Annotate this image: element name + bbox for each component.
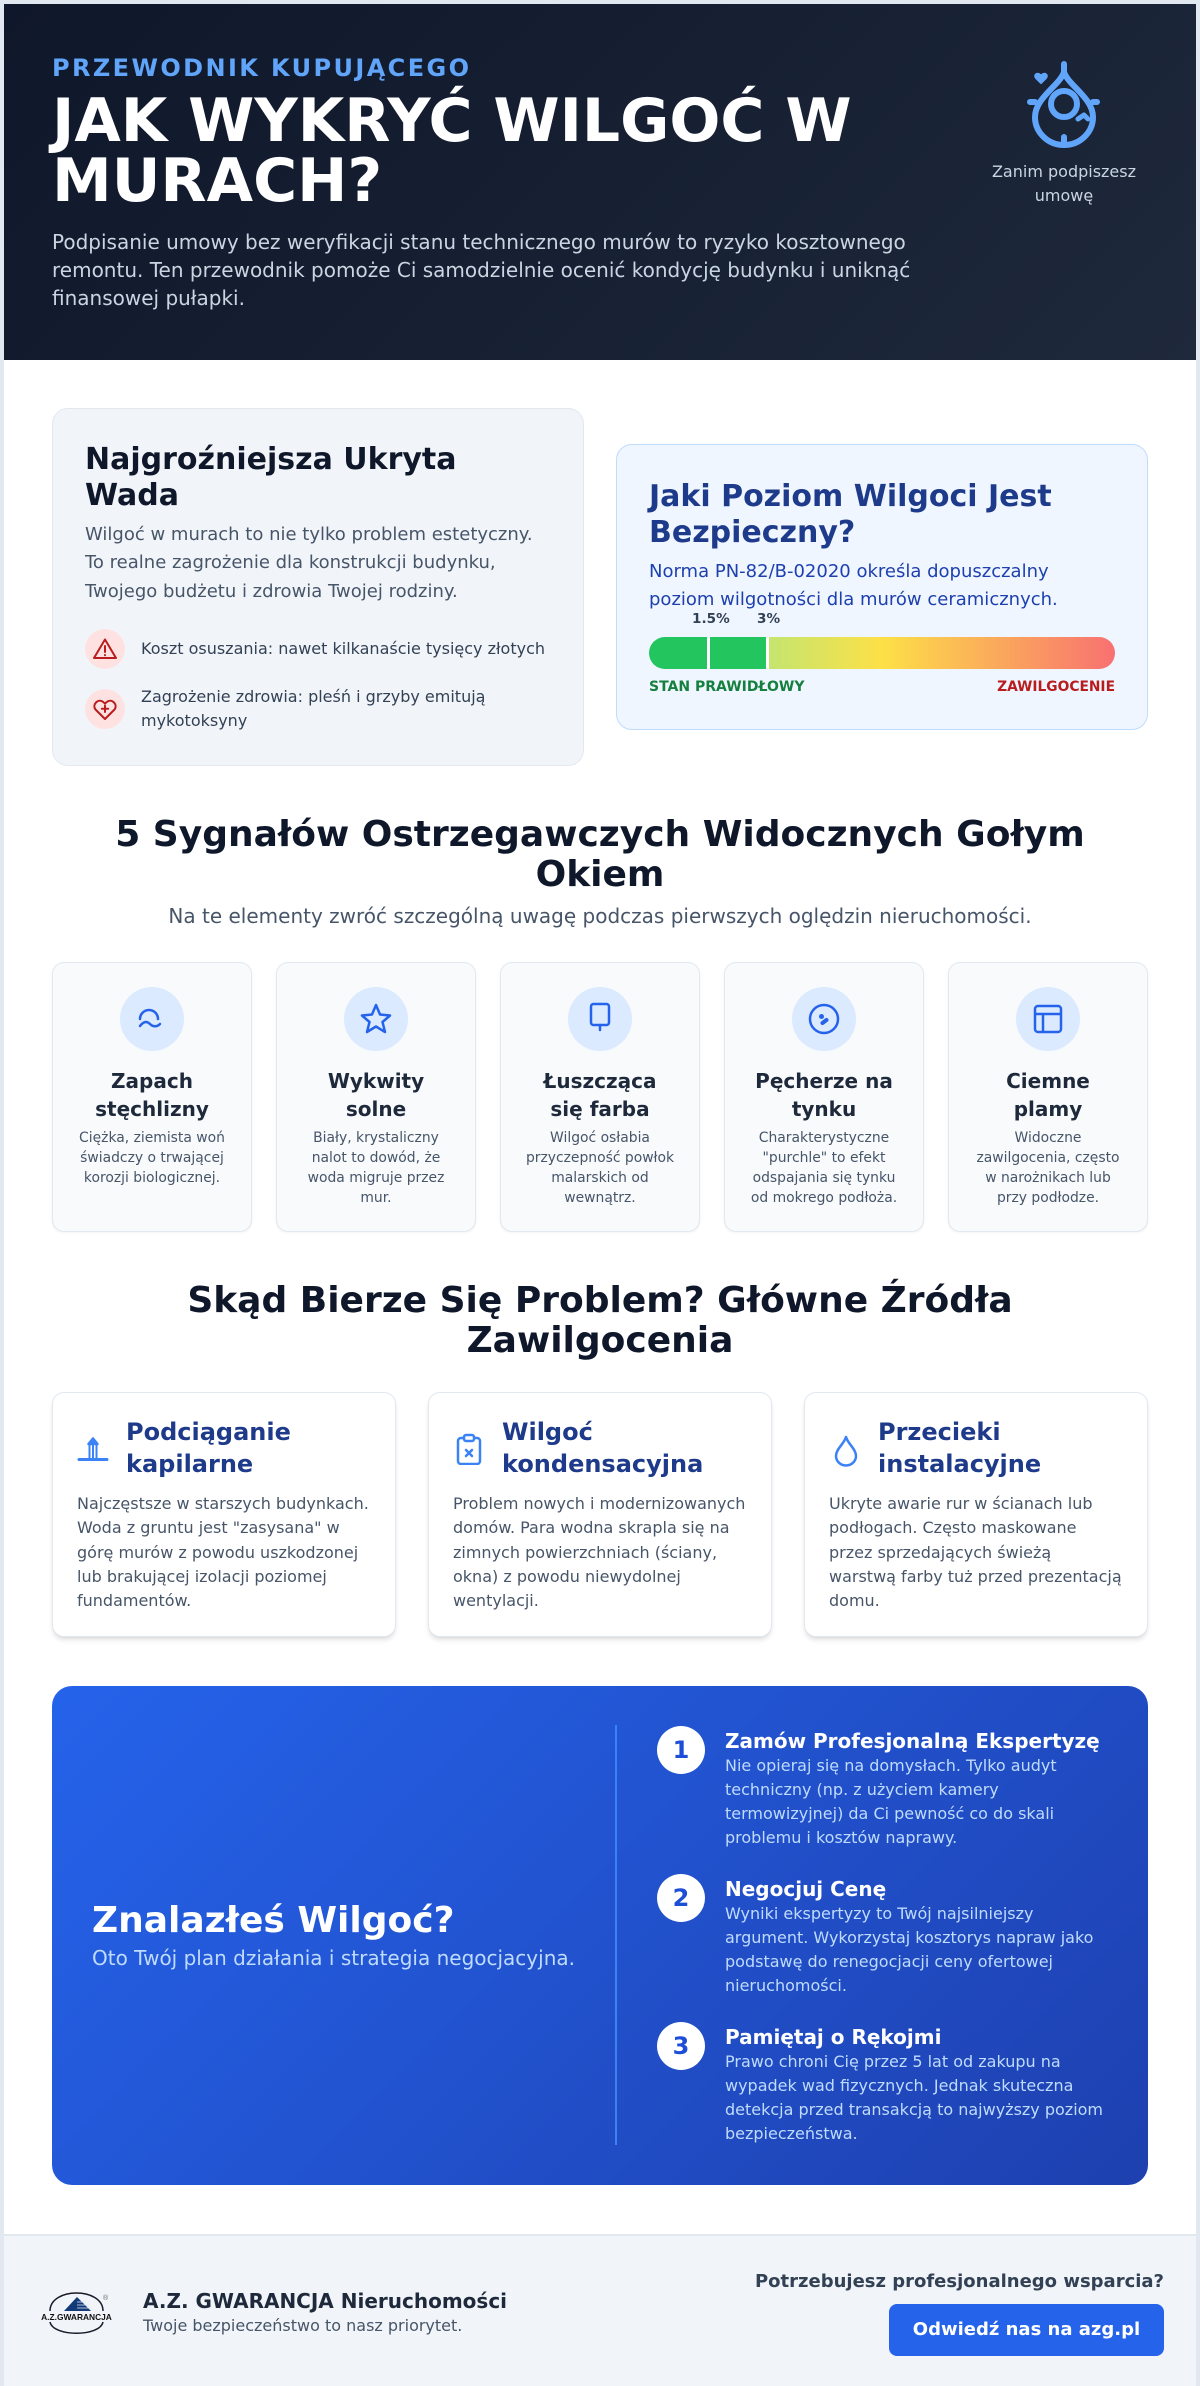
description xyxy=(84,524,533,602)
card: salt: nalot to dowód, że xyxy=(312,1150,440,1166)
card: leaks: domu. xyxy=(829,1591,880,1610)
card: smell: świadczy o trwającej xyxy=(80,1150,224,1166)
card: blisters: tynku xyxy=(792,1097,856,1121)
card: capillary rise: Podciąganie xyxy=(126,1418,291,1446)
heading xyxy=(85,442,456,513)
step 3: 3 xyxy=(673,2032,689,2060)
card: salt: mur. xyxy=(360,1190,392,1206)
scale right label: ZAWILGOCENIE xyxy=(997,679,1115,695)
card: peeling paint xyxy=(500,962,700,1232)
icon: paint xyxy=(568,987,632,1051)
card: capillary rise: fundamentów. xyxy=(77,1591,191,1610)
card: condensation: Wilgoć xyxy=(502,1418,593,1446)
label 1.5%: 1.5% xyxy=(692,611,730,627)
header intro text: remontu. Ten przewodnik pomoże Ci samodzielnie ocenić kondycję budynku i uniknąć xyxy=(52,258,910,282)
heading: sources: Skąd Bierze Się Problem? Główne Źródła xyxy=(187,1280,1013,1321)
card: smell: Ciężka, ziemista woń xyxy=(79,1130,225,1146)
heading: Wada xyxy=(85,478,179,513)
description: Norma PN-82/B-02020 określa dopuszczalny xyxy=(649,561,1049,582)
logo: A.Z.GWARANCJA xyxy=(41,2312,112,2322)
description: Twojego budżetu i zdrowia Twojej rodziny. xyxy=(85,581,458,602)
card: salt: woda migruje przez xyxy=(308,1170,444,1186)
card: peeling paint: przyczepność powłok xyxy=(526,1150,674,1166)
heading: five signals: 5 Sygnałów Ostrzegawczych Widocznych Gołym xyxy=(115,814,1085,855)
step 3: wypadek wad fizycznych. Jednak skuteczna xyxy=(725,2076,1073,2095)
card: leaks: warstwą farby tuż przed prezentacją xyxy=(829,1567,1122,1586)
card: condensation: domów. Para wodna skrapla się na xyxy=(453,1518,730,1537)
card: smell: korozji biologicznej. xyxy=(84,1170,220,1186)
card: capillary rise: Woda z gruntu jest "zasysana" w xyxy=(77,1518,340,1537)
icon: moisture drop xyxy=(1027,61,1100,148)
step 1: termowizyjnej) da Ci pewność co do skali xyxy=(725,1804,1054,1823)
card: capillary rise: górę murów z powodu uszkodzonej xyxy=(77,1543,358,1562)
heading: sources: Zawilgocenia xyxy=(467,1320,733,1361)
heading: Najgroźniejsza Ukryta xyxy=(85,442,456,477)
description: Wilgoć w murach to nie tylko problem estetyczny. xyxy=(85,524,533,545)
step 1: Nie opieraj się na domysłach. Tylko audyt xyxy=(725,1756,1057,1775)
card: leaks: Przecieki xyxy=(878,1418,1001,1446)
card: dark stains: przy podłodze. xyxy=(997,1190,1099,1206)
panel: safe humidity xyxy=(616,444,1148,730)
logo xyxy=(41,2292,112,2334)
card: salt: Biały, krystaliczny xyxy=(313,1130,439,1146)
step 3 xyxy=(657,2022,1103,2143)
company name: A.Z. GWARANCJA Nieruchomości xyxy=(143,2289,507,2313)
step 2: nieruchomości. xyxy=(725,1976,847,1995)
card: condensation: okna) z powodu niewydolnej xyxy=(453,1567,681,1586)
health text: Zagrożenie zdrowia: pleśń i grzyby emitują xyxy=(141,687,485,706)
cta button: Odwiedź nas na azg.pl xyxy=(913,2319,1140,2340)
company tagline: Twoje bezpieczeństwo to nasz priorytet. xyxy=(143,2316,462,2335)
step 2 xyxy=(657,1874,1093,1995)
card: blisters xyxy=(724,962,924,1232)
title: JAK WYKRYĆ WILGOĆ W xyxy=(52,86,852,156)
step 1: Zamów Profesjonalną Ekspertyzę xyxy=(725,1729,1100,1753)
cost text: Koszt osuszania: nawet kilkanaście tysięcy złotych xyxy=(141,639,545,658)
card: smell xyxy=(52,962,252,1232)
card: dark stains xyxy=(948,962,1148,1232)
icon caption: umowę xyxy=(1035,186,1093,205)
card: dark stains: Ciemne xyxy=(1006,1069,1090,1093)
card: condensation: Problem nowych i modernizowanych xyxy=(453,1494,745,1513)
heading: five signals xyxy=(115,814,1085,895)
card: leaks: instalacyjne xyxy=(878,1450,1041,1478)
action plan subheading: Oto Twój plan działania i strategia negocjacyjna. xyxy=(92,1946,575,1970)
card: peeling paint: Wilgoć osłabia xyxy=(550,1130,650,1146)
icon: warning xyxy=(85,629,125,669)
subheading: five signals: Na te elementy zwróć szczególną uwagę podczas pierwszych oględzin nieruchomości. xyxy=(168,904,1032,928)
step 2: podstawę do renegocjacji ceny ofertowej xyxy=(725,1952,1053,1971)
card: capillary rise: Najczęstsze w starszych budynkach. xyxy=(77,1494,369,1513)
card: condensation: wentylacji. xyxy=(453,1591,539,1610)
header banner xyxy=(4,4,1196,360)
description xyxy=(649,561,1058,610)
humidity scale bar xyxy=(649,637,1115,669)
card: salt: solne xyxy=(346,1097,406,1121)
panel: action plan xyxy=(52,1686,1148,2185)
label 3%: 3% xyxy=(757,611,780,627)
step 3: Prawo chroni Cię przez 5 lat od zakupu na xyxy=(725,2052,1061,2071)
card: blisters: Charakterystyczne xyxy=(759,1130,889,1146)
card: salt xyxy=(276,962,476,1232)
icon: star xyxy=(344,987,408,1051)
card: smell: stęchlizny xyxy=(95,1097,209,1121)
icon: clipboard xyxy=(456,1434,482,1465)
card: capillary rise xyxy=(52,1392,396,1637)
divider xyxy=(615,1725,617,2145)
step 1: techniczny (np. z użyciem kamery xyxy=(725,1780,999,1799)
card: smell: Zapach xyxy=(111,1069,193,1093)
eyebrow: PRZEWODNIK KUPUJĄCEGO xyxy=(52,54,471,82)
step 2: Wyniki ekspertyzy to Twój najsilniejszy xyxy=(725,1904,1033,1923)
card: blisters: odspajania się tynku xyxy=(753,1170,895,1186)
card: dark stains: Widoczne xyxy=(1015,1130,1081,1146)
header intro text: Podpisanie umowy bez weryfikacji stanu technicznego murów to ryzyko kosztownego xyxy=(52,230,906,254)
header intro text: finansowej pułapki. xyxy=(52,286,245,310)
card: peeling paint: się farba xyxy=(550,1097,650,1121)
card: capillary rise: kapilarne xyxy=(126,1450,253,1478)
step 2: 2 xyxy=(673,1884,689,1912)
heading xyxy=(647,479,1052,550)
icon: capillary xyxy=(78,1437,108,1461)
step 3: bezpieczeństwa. xyxy=(725,2124,858,2143)
cta button xyxy=(889,2304,1164,2356)
card: condensation: zimnych powierzchniach (ściany, xyxy=(453,1543,717,1562)
title: MURACH? xyxy=(52,146,382,216)
icon: blister xyxy=(792,987,856,1051)
card: capillary rise: lub brakującej izolacji poziomej xyxy=(77,1567,327,1586)
scale left label: STAN PRAWIDŁOWY xyxy=(649,679,804,695)
description: To realne zagrożenie dla konstrukcji budynku, xyxy=(85,552,496,573)
action plan heading: Znalazłeś Wilgoć? xyxy=(92,1900,454,1941)
health text: mykotoksyny xyxy=(141,711,247,730)
card: salt: Wykwity xyxy=(328,1069,424,1093)
title xyxy=(48,86,852,216)
heading: Jaki Poziom Wilgoci Jest xyxy=(649,479,1052,514)
step 2: Negocjuj Cenę xyxy=(725,1877,886,1901)
heading: Bezpieczny? xyxy=(649,515,855,550)
card: dark stains: plamy xyxy=(1014,1097,1082,1121)
description: poziom wilgotności dla murów ceramicznych. xyxy=(649,589,1058,610)
logo: ® xyxy=(103,2294,109,2302)
step 3: Pamiętaj o Rękojmi xyxy=(725,2025,941,2049)
card: blisters: Pęcherze na xyxy=(755,1069,893,1093)
card: condensation: kondensacyjna xyxy=(502,1450,703,1478)
card: leaks: przez sprzedających świeżą xyxy=(829,1543,1051,1562)
card: blisters: "purchle" to efekt xyxy=(763,1150,885,1166)
icon caption: Zanim podpiszesz xyxy=(992,162,1136,181)
card: leaks xyxy=(804,1392,1148,1637)
card: leaks: podłogach. Często maskowane xyxy=(829,1518,1076,1537)
icon: health xyxy=(85,689,125,729)
support question: Potrzebujesz profesjonalnego wsparcia? xyxy=(755,2271,1164,2292)
card: condensation xyxy=(428,1392,772,1637)
card: leaks: Ukryte awarie rur w ścianach lub xyxy=(829,1494,1093,1513)
step 3: detekcja przed transakcją to najwyższy poziom xyxy=(725,2100,1103,2119)
health text xyxy=(141,687,485,730)
card: dark stains: zawilgocenia, często xyxy=(976,1150,1120,1166)
heading: sources xyxy=(187,1278,1013,1361)
step 1 xyxy=(657,1726,1100,1847)
icon: drop xyxy=(834,1436,858,1467)
card: peeling paint: wewnątrz. xyxy=(564,1190,636,1206)
card: peeling paint: Łuszcząca xyxy=(544,1069,656,1093)
panel: hidden defect xyxy=(52,408,584,766)
card: blisters: od mokrego podłoża. xyxy=(751,1190,897,1206)
step 1: problemu i kosztów naprawy. xyxy=(725,1828,957,1847)
icon: stain layout xyxy=(1016,987,1080,1051)
icon caption xyxy=(992,162,1136,205)
card: dark stains: w narożnikach lub xyxy=(985,1170,1111,1186)
heading: five signals: Okiem xyxy=(536,854,664,895)
step 1: 1 xyxy=(673,1736,689,1764)
footer xyxy=(4,2234,1196,2386)
icon: smell waves xyxy=(120,987,184,1051)
card: peeling paint: malarskich od xyxy=(551,1170,649,1186)
step 2: argument. Wykorzystaj kosztorys napraw jako xyxy=(725,1928,1093,1947)
header intro text xyxy=(52,230,910,310)
